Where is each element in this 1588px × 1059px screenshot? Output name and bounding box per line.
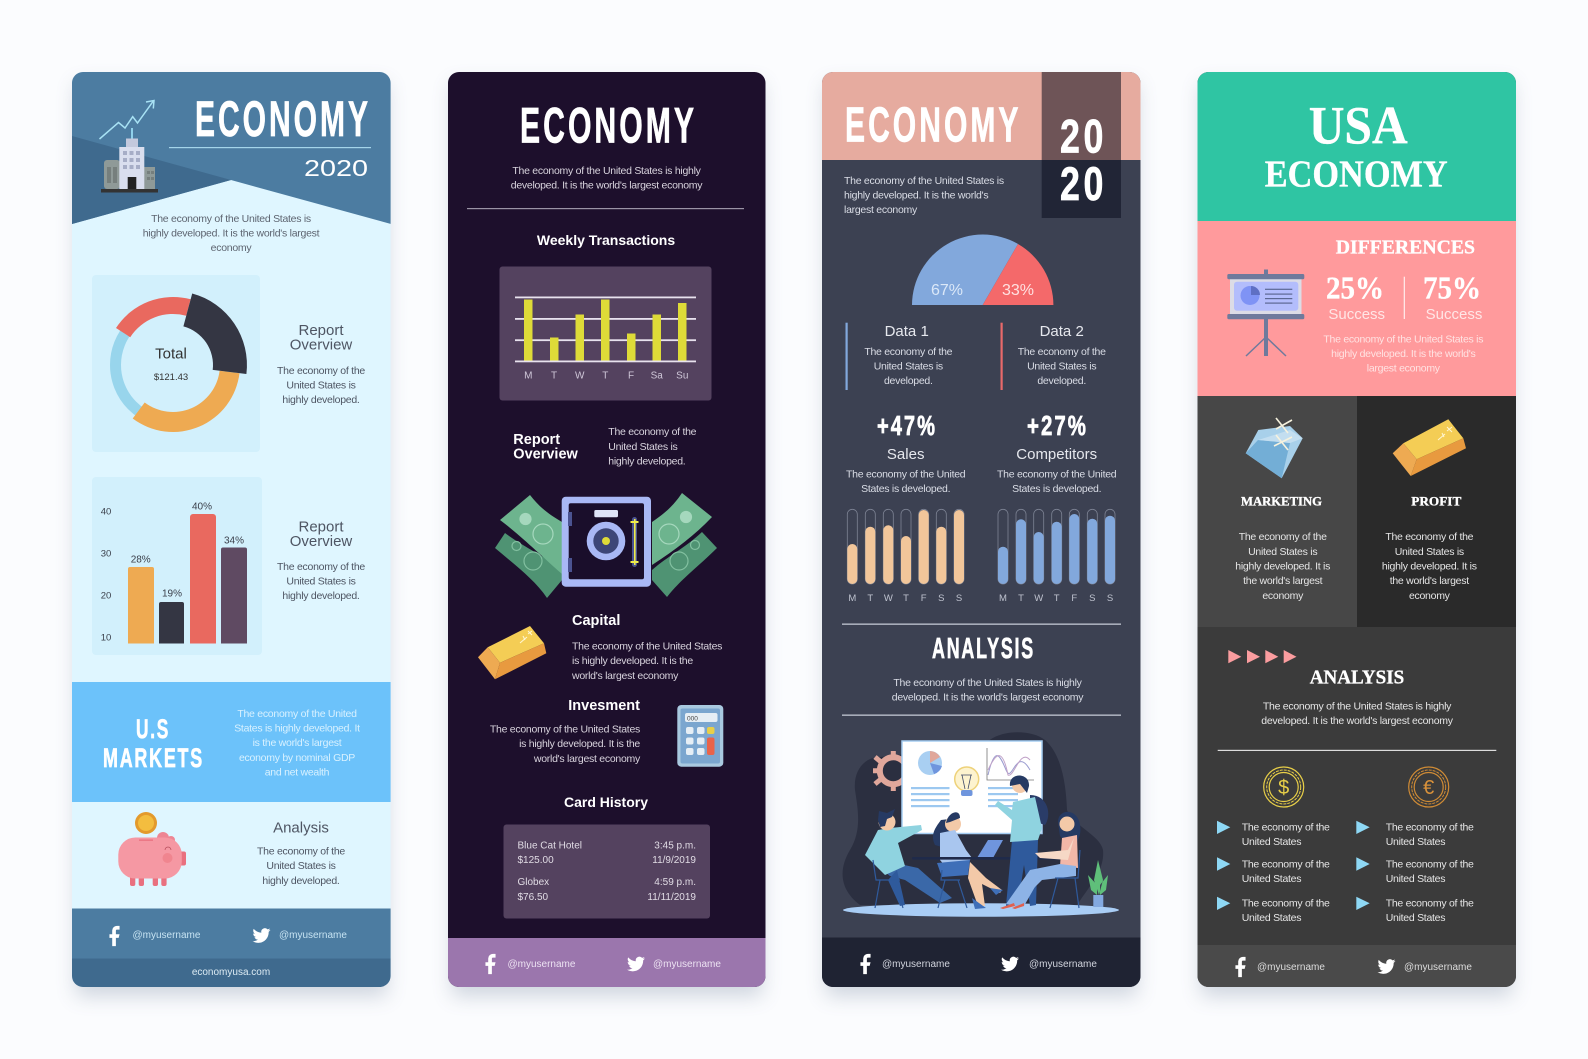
half pie chart: 67% [931, 282, 963, 299]
icon: gold bar [1393, 419, 1466, 476]
sales stat: Sales [887, 446, 924, 463]
band: U.S markets: States is highly developed. It [234, 722, 360, 734]
analysis text: The economy of the [257, 846, 345, 858]
list column 1: United States [1242, 873, 1301, 885]
capital text: is highly developed. It is the [572, 655, 693, 667]
title: ECONOMY [520, 98, 697, 154]
icon: rising arrow over building [100, 100, 158, 192]
data 2: The economy of the [1018, 346, 1106, 358]
panel: card history [504, 824, 710, 918]
panel: card history: $125.00 [518, 855, 554, 866]
panel: marketing: The economy of the [1239, 531, 1327, 543]
report overview 1: Report [298, 322, 344, 339]
report overview 1: highly developed. [282, 394, 360, 406]
differences text: highly developed. It is the world's [1331, 348, 1475, 360]
panel: weekly bar chart: Sa [651, 370, 663, 382]
heading: card history: Card History [564, 794, 648, 810]
header band [1197, 72, 1516, 221]
bar chart: sales: S [938, 593, 944, 604]
report overview: United States is [608, 441, 678, 453]
bar chart: competitors: W [1034, 593, 1043, 604]
report overview 1: United States is [286, 380, 356, 392]
icon: dollar coin [1264, 767, 1304, 807]
icon: dollar coin: $ [1278, 777, 1289, 799]
bar chart: sales: M [848, 593, 856, 604]
icon: euro coin [1409, 767, 1449, 807]
panel: card history: $76.50 [518, 892, 549, 903]
report overview 2: Report [298, 518, 344, 536]
bar chart: competitors: F [1071, 593, 1077, 604]
panel: weekly bar chart: T [551, 370, 557, 382]
competitors stat: Competitors [1016, 446, 1097, 463]
analysis text [1261, 700, 1454, 727]
data 1: developed. [884, 375, 933, 387]
bar chart: sales: S [956, 593, 962, 604]
panel: marketing: the world's largest [1243, 575, 1323, 587]
band: U.S markets: U.S [136, 714, 170, 744]
panel: card history: 11/11/2019 [647, 892, 696, 903]
panel: card 1 blue economy 2020 [72, 72, 391, 988]
intro text: largest economy [844, 204, 918, 216]
panel: weekly bar chart [500, 266, 712, 400]
report overview 2 [277, 518, 365, 602]
bar chart: sales: F [921, 593, 927, 604]
panel: marketing: MARKETING [1241, 494, 1322, 508]
panel: bar chart: 19% [162, 588, 182, 600]
bar chart: competitors [998, 509, 1115, 604]
list column 1 [1217, 821, 1330, 924]
data 1: The economy of the [864, 346, 953, 358]
panel: card 2 dark purple economy [448, 72, 766, 987]
title: ECONOMY [195, 91, 371, 147]
panel: weekly bar chart: Su [676, 370, 688, 382]
report overview: highly developed. [608, 456, 685, 468]
panel: differences: DIFFERENCES [1336, 236, 1475, 258]
footer: @myusername [132, 930, 201, 941]
data 2: developed. [1037, 375, 1086, 387]
title: ECONOMY [845, 98, 1022, 152]
panel: donut chart [92, 275, 260, 452]
investment text: world's largest economy [533, 753, 641, 765]
footer [1197, 945, 1516, 987]
icon: gold bar [478, 626, 546, 679]
panel: differences [1197, 221, 1516, 396]
person standing [1030, 795, 1048, 825]
bar chart: competitors: T [1018, 593, 1024, 604]
panel: card 4 USA economy [1197, 72, 1516, 987]
panel: marketing: highly developed. It is [1235, 560, 1330, 572]
footer: economyusa.com [192, 967, 270, 978]
panel: weekly bar chart: T [602, 370, 608, 382]
illustration: team meeting [843, 732, 1119, 917]
footer [822, 938, 1141, 988]
panel: card history: Globex [518, 877, 549, 888]
list column 2: The economy of the [1386, 858, 1474, 870]
icon: diamond [1246, 418, 1303, 478]
bar chart: sales: T [903, 593, 909, 604]
stat 75 percent: Success [1426, 306, 1482, 323]
panel: marketing: United States is [1248, 546, 1317, 558]
person right [1058, 812, 1080, 848]
header band: ECONOMY [1265, 153, 1448, 195]
list column 2: The economy of the [1386, 822, 1474, 834]
report overview 1: Overview [290, 336, 352, 354]
heading: analysis: ANALYSIS [932, 633, 1035, 665]
panel: donut chart: Total [155, 346, 187, 362]
icon: calculator [677, 705, 723, 767]
header band: USA [1309, 96, 1408, 156]
header band [822, 72, 1141, 160]
band: U.S markets: and net wealth [265, 766, 330, 778]
intro text [143, 213, 320, 254]
band: U.S markets: economy by nominal GDP [239, 752, 355, 764]
heading: analysis: ANALYSIS [1310, 666, 1404, 688]
list column 1: United States [1242, 912, 1301, 924]
panel: bar chart: 10 [101, 632, 111, 644]
report overview: The economy of the [608, 426, 697, 438]
panel: donut chart: $121.43 [154, 372, 188, 383]
report overview 2: Overview [290, 533, 352, 550]
panel: profit: The economy of the [1385, 531, 1474, 543]
report overview 2: The economy of the [277, 561, 365, 573]
year block: 20 [1060, 157, 1107, 210]
bar chart: sales [847, 509, 964, 604]
icon: piggy bank [118, 812, 186, 886]
panel: marketing [1197, 396, 1357, 627]
band: U.S markets: MARKETS [103, 743, 204, 773]
data 1 [846, 323, 953, 390]
sales stat [846, 410, 966, 495]
half pie chart: 33% [1002, 282, 1034, 299]
report overview: Report [513, 432, 560, 448]
analysis text: Analysis [273, 820, 329, 836]
intro text: The economy of the United States is [844, 175, 1004, 187]
report overview: Overview [513, 446, 579, 462]
band: U.S markets [72, 682, 391, 802]
footer: @myusername [508, 959, 576, 970]
band: U.S markets: The economy of the United [237, 708, 357, 720]
gear [880, 757, 907, 784]
stat 25 percent [1326, 269, 1385, 323]
panel: bar chart: 30 [101, 548, 111, 560]
investment text: The economy of the United States [490, 724, 640, 736]
analysis text: developed. It is the world's largest economy [892, 692, 1084, 704]
analysis text: United States is [266, 860, 336, 872]
differences text [1323, 334, 1483, 374]
list column 2: United States [1386, 873, 1445, 885]
year block [1042, 72, 1121, 218]
panel: bar chart: 40 [101, 506, 111, 518]
data 1: Data 1 [885, 323, 929, 340]
panel: weekly bar chart: F [628, 370, 634, 382]
bar chart: competitors: S [1089, 593, 1095, 604]
heading: weekly transactions: Weekly Transactions [537, 232, 675, 248]
report overview 2: highly developed. [282, 590, 360, 602]
icon: calculator: 000 [687, 716, 698, 722]
list column 2: United States [1386, 912, 1445, 924]
list column 1: United States [1242, 836, 1301, 848]
footer [448, 938, 766, 987]
panel: marketing: economy [1262, 590, 1304, 602]
capital text: world's largest economy [571, 670, 679, 682]
analysis text: highly developed. [262, 875, 340, 887]
panel: bar chart: 34% [224, 536, 244, 546]
panel: profit: highly developed. It is [1382, 560, 1477, 572]
intro text: developed. It is the world's largest economy [511, 180, 703, 192]
panel: profit: economy [1409, 590, 1451, 602]
person left [880, 863, 952, 903]
competitors stat [997, 410, 1117, 495]
panel: profit: United States is [1395, 546, 1464, 558]
footer: @myusername [882, 959, 950, 970]
bar chart: sales: W [884, 593, 893, 604]
panel: weekly bar chart: W [575, 370, 585, 382]
laptop [977, 840, 1003, 858]
icon: safe with banknotes [495, 493, 717, 598]
panel: bar chart [92, 477, 262, 655]
stat 25 percent: Success [1328, 306, 1385, 323]
bar chart: competitors: S [1107, 593, 1113, 604]
sales stat: The economy of the United [846, 468, 966, 480]
icon: presentation board [1227, 270, 1304, 356]
investment text [490, 698, 641, 765]
analysis text: developed. It is the world's largest economy [1261, 715, 1454, 727]
intro text [844, 175, 1004, 216]
plant [1093, 895, 1103, 907]
half pie chart [912, 235, 1053, 305]
report overview 2: United States is [286, 576, 356, 588]
footer: @myusername [1029, 959, 1097, 970]
panel: weekly bar chart: M [524, 370, 532, 382]
footer: @myusername [279, 930, 347, 941]
panel: profit: the world's largest [1390, 575, 1469, 587]
intro text [511, 165, 703, 192]
analysis text: The economy of the United States is highly [893, 677, 1083, 689]
icon: pink arrows [1228, 650, 1296, 663]
header banner [72, 72, 391, 224]
person centre [933, 818, 958, 848]
panel: card history: Blue Cat Hotel [518, 840, 582, 852]
stat 25 percent: 25% [1326, 269, 1384, 305]
panel: card history: 4:59 p.m. [654, 877, 696, 888]
panel: card history: 11/9/2019 [652, 855, 696, 866]
list column 1: The economy of the [1242, 822, 1330, 834]
footer [72, 908, 391, 988]
competitors stat: The economy of the United [997, 468, 1117, 480]
list column 2: The economy of the [1386, 898, 1474, 910]
panel: card 3 slate economy 2020 [822, 72, 1141, 988]
analysis text [257, 820, 345, 887]
differences text: The economy of the United States is [1323, 334, 1483, 346]
capital text: Capital [572, 613, 620, 629]
bar chart: competitors: T [1054, 593, 1060, 604]
year block: 20 [1060, 110, 1107, 163]
footer: @myusername [1257, 962, 1325, 973]
panel: profit: PROFIT [1411, 494, 1462, 508]
band: U.S markets: is the world's largest [253, 737, 342, 749]
report overview 1: The economy of the [277, 365, 365, 377]
intro text: The economy of the United States is highly [512, 165, 702, 177]
bar chart: sales: T [867, 593, 873, 604]
stat 75 percent: 75% [1423, 269, 1481, 305]
year: 2020 [304, 155, 368, 181]
list column 1: The economy of the [1242, 898, 1330, 910]
stat 75 percent [1423, 269, 1482, 323]
data 2: United States is [1027, 360, 1096, 372]
list column 2 [1356, 821, 1474, 924]
footer: @myusername [653, 959, 721, 970]
icon: euro coin: € [1423, 777, 1434, 799]
analysis text [892, 677, 1084, 704]
intro text: highly developed. It is the world's largest [143, 228, 320, 240]
panel: bar chart: 28% [131, 554, 151, 566]
intro text: highly developed. It is the world's [844, 190, 988, 202]
differences text: largest economy [1367, 362, 1441, 374]
data 2: Data 2 [1040, 323, 1084, 340]
competitors stat: +27% [1027, 410, 1088, 441]
investment text: Invesment [568, 698, 640, 714]
panel: card history: 3:45 p.m. [654, 840, 696, 852]
data 1: United States is [874, 360, 943, 372]
list column 1: The economy of the [1242, 858, 1330, 870]
intro text: The economy of the United States is [151, 213, 311, 225]
sales stat: +47% [877, 410, 937, 441]
panel: bar chart: 40% [192, 502, 212, 512]
whiteboard [902, 741, 1042, 834]
capital text [571, 613, 722, 682]
capital text: The economy of the United States [572, 640, 722, 652]
sales stat: States is developed. [861, 483, 950, 495]
report overview 1 [277, 322, 365, 406]
bar chart: competitors: M [999, 593, 1007, 604]
list column 2: United States [1386, 836, 1445, 848]
panel: profit [1357, 396, 1516, 627]
footer: @myusername [1404, 962, 1472, 973]
investment text: is highly developed. It is the [519, 738, 640, 750]
panel: bar chart: 20 [101, 590, 111, 602]
data 2 [1000, 323, 1106, 390]
report overview [513, 426, 697, 468]
analysis text: The economy of the United States is highly [1263, 700, 1452, 712]
competitors stat: States is developed. [1012, 483, 1101, 495]
intro text: economy [211, 242, 252, 254]
